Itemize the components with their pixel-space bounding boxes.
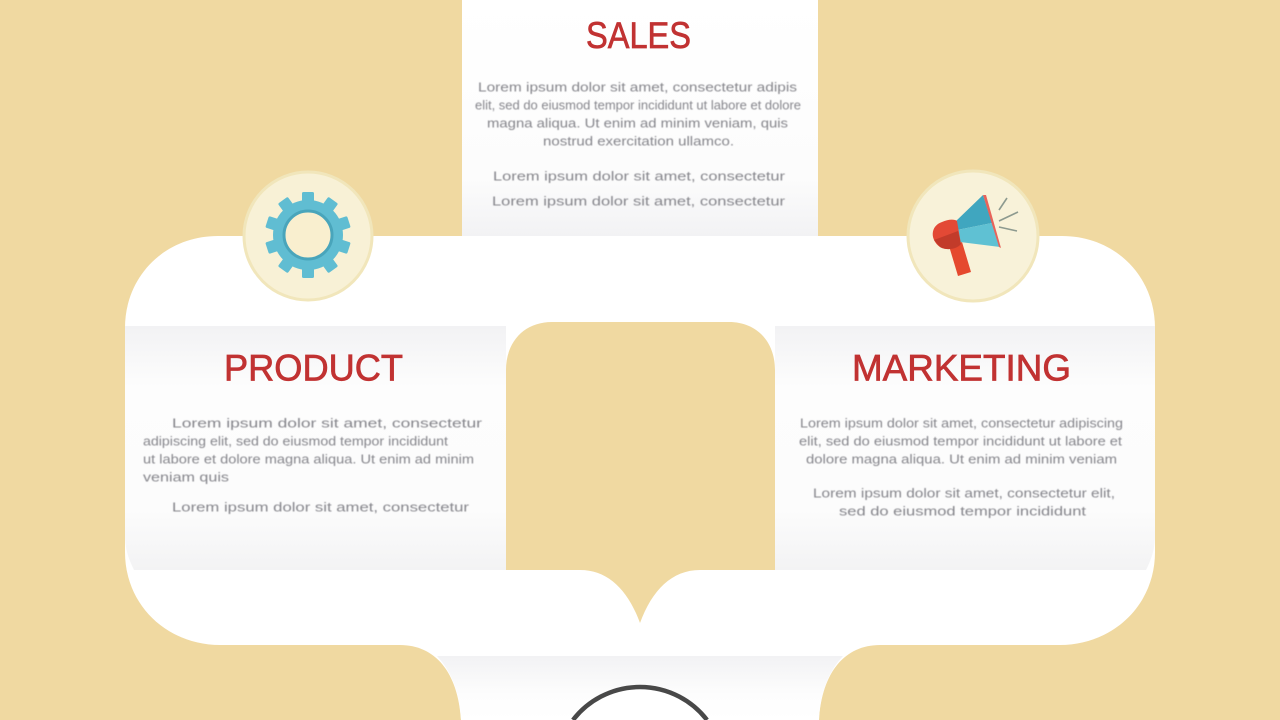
icon: megaphone badge <box>908 171 1038 301</box>
icon: gear badge <box>244 172 372 300</box>
text block: sales: magna aliqua. Ut enim ad minim veniam, quis <box>487 116 789 130</box>
icon: megaphone <box>933 195 1018 276</box>
text block: sales: Lorem ipsum dolor sit amet, consectetur <box>492 194 786 208</box>
text block: marketing <box>799 416 1123 518</box>
center cut-out with pointer <box>506 322 775 623</box>
heading: marketing: MARKETING <box>852 348 1071 388</box>
text block: marketing: elit, sed do eiusmod tempor incididunt ut labore et <box>799 434 1122 448</box>
text block: marketing: sed do eiusmod tempor incididunt <box>839 504 1086 518</box>
text block: marketing: Lorem ipsum dolor sit amet, consectetur adipiscing <box>800 416 1123 430</box>
text block: product: Lorem ipsum dolor sit amet, consectetur <box>172 500 470 514</box>
text block: product: adipiscing elit, sed do eiusmod tempor incididunt <box>143 434 448 448</box>
heading: sales: SALES <box>586 15 691 56</box>
text block: sales: Lorem ipsum dolor sit amet, consectetur <box>493 168 786 184</box>
text block: sales: Lorem ipsum dolor sit amet, consectetur adipis <box>478 80 798 94</box>
text block: marketing: Lorem ipsum dolor sit amet, consectetur elit, <box>813 486 1115 500</box>
heading: product: PRODUCT <box>224 348 403 388</box>
text block: product: Lorem ipsum dolor sit amet, consectetur <box>172 416 483 430</box>
text block: sales <box>475 80 801 208</box>
text block: product: ut labore et dolore magna aliqua. Ut enim ad minim <box>143 452 474 466</box>
text block: product: veniam quis <box>143 470 230 484</box>
icon: partial circle at bottom <box>573 687 707 720</box>
text block: sales: elit, sed do eiusmod tempor incididunt ut labore et dolore <box>475 98 801 112</box>
text block: marketing: dolore magna aliqua. Ut enim ad minim veniam <box>806 452 1117 466</box>
icon: gear <box>265 192 351 278</box>
panel: bottom section <box>437 656 843 720</box>
text block: product <box>143 416 483 514</box>
text block: sales: nostrud exercitation ullamco. <box>543 134 734 148</box>
panel: central white frame <box>125 236 1155 720</box>
panel: sales card <box>462 0 818 237</box>
panel: product background <box>125 326 506 570</box>
panel: marketing background <box>775 326 1155 570</box>
